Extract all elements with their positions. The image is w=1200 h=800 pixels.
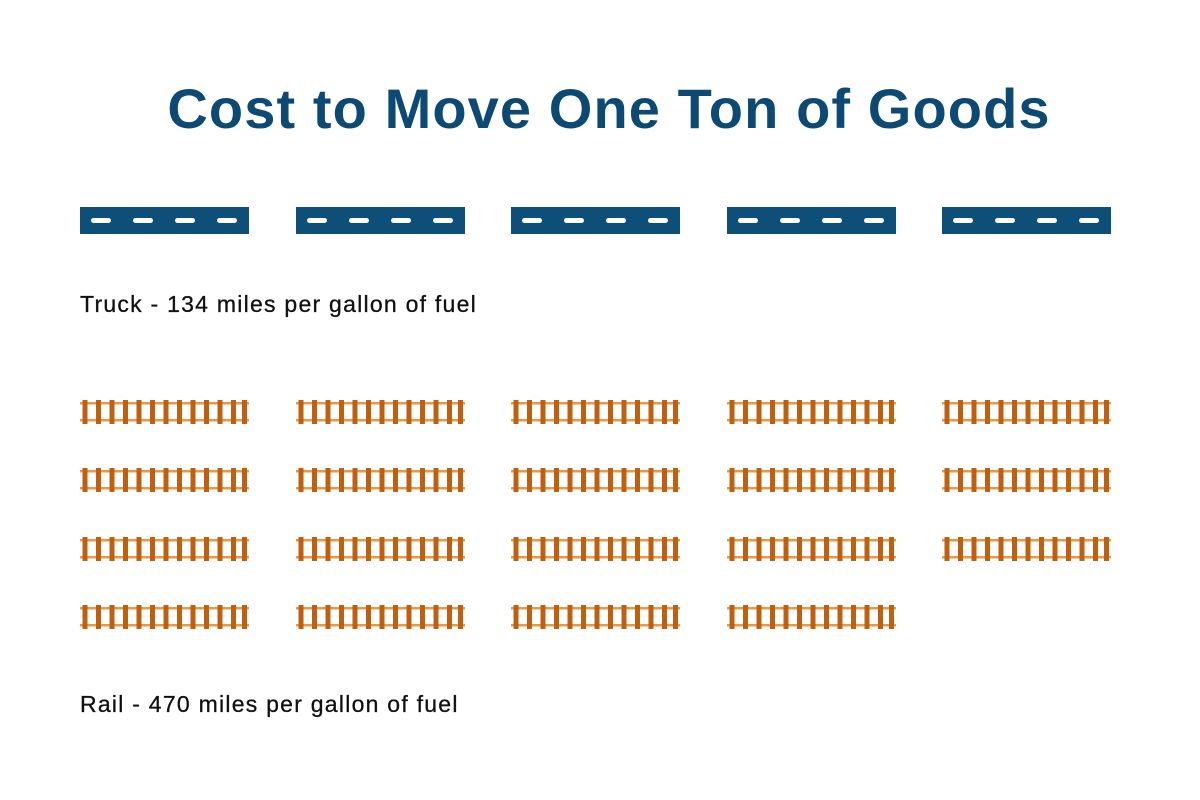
title: Cost to Move One Ton of Goods [167, 77, 1051, 140]
icon: roads row [80, 207, 1111, 234]
label: truck: Truck - 134 miles per gallon of fuel [80, 291, 477, 317]
label: rail: Rail - 470 miles per gallon of fuel [80, 691, 459, 717]
icon: rails grid [80, 400, 1111, 629]
